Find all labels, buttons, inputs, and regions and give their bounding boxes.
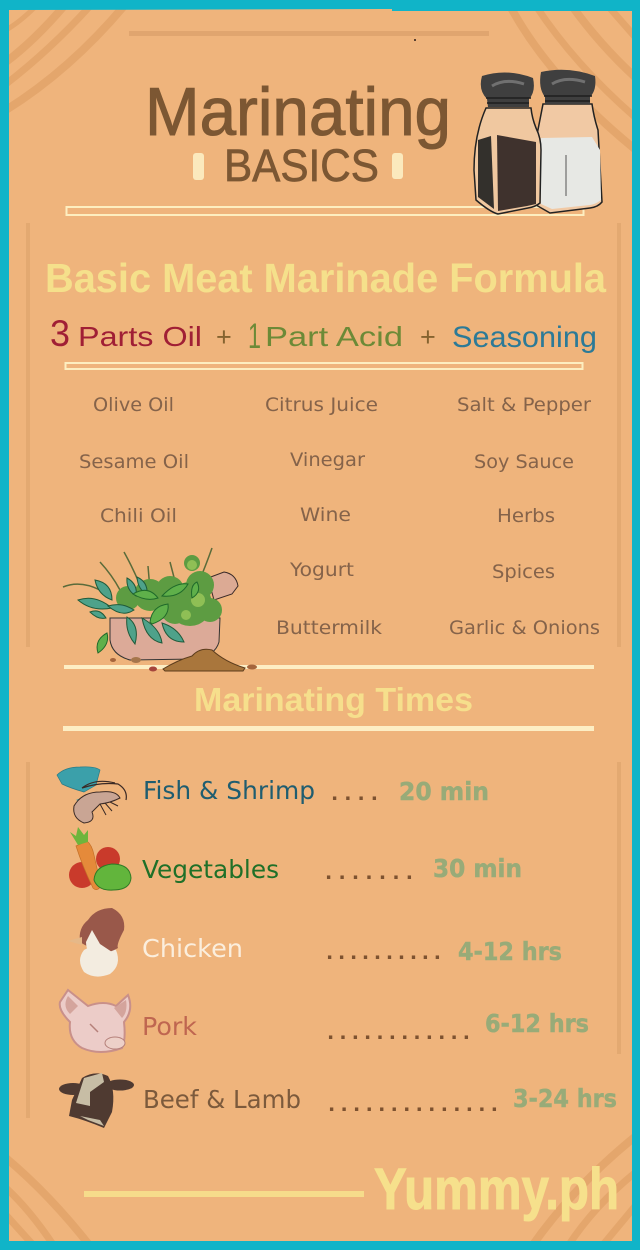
icon: salt and pepper shakers bbox=[474, 70, 602, 214]
side rules bbox=[26, 223, 621, 1118]
ingredients: oils: Olive Oil bbox=[93, 394, 174, 416]
ingredients: acids: Buttermilk bbox=[276, 617, 382, 639]
icon: vegetables bbox=[69, 827, 131, 890]
row: beef and lamb: .............. bbox=[328, 1094, 498, 1116]
title side marks bbox=[193, 153, 403, 180]
row: vegetables: ....... bbox=[325, 862, 413, 884]
section rule bbox=[64, 665, 594, 669]
row: vegetables bbox=[69, 827, 522, 890]
row: beef and lamb bbox=[59, 1073, 617, 1128]
ingredients: oils: Sesame Oil bbox=[79, 451, 189, 473]
title bbox=[145, 74, 451, 191]
formula line: + bbox=[216, 322, 232, 352]
row: vegetables: 30 min bbox=[433, 854, 522, 883]
icon: fish and shrimp bbox=[57, 767, 126, 823]
icon: pig head bbox=[60, 990, 130, 1052]
formula line: Seasoning bbox=[452, 321, 597, 354]
corner decoration: top right bbox=[510, 6, 636, 150]
icon: chicken bbox=[68, 908, 124, 977]
formula line: Parts Oil bbox=[78, 321, 202, 352]
row: fish and shrimp: Fish & Shrimp bbox=[143, 776, 315, 805]
corner decoration: bottom right bbox=[532, 1136, 636, 1246]
row: pork: 6-12 hrs bbox=[485, 1009, 589, 1038]
row: chicken: .......... bbox=[326, 942, 441, 964]
ingredients: seasonings: Soy Sauce bbox=[474, 451, 574, 473]
formula underline box bbox=[66, 363, 582, 369]
icon: herbs in mortar bbox=[63, 548, 257, 672]
corner decoration: top left bbox=[6, 6, 124, 110]
ingredients: acids bbox=[265, 394, 382, 639]
row: chicken bbox=[68, 908, 562, 977]
section rule bbox=[63, 726, 594, 731]
row: pork: Pork bbox=[142, 1012, 198, 1041]
title underline box bbox=[66, 207, 584, 215]
footer rule bbox=[84, 1191, 364, 1197]
row: beef and lamb: Beef & Lamb bbox=[143, 1085, 301, 1114]
ingredients: seasonings: Herbs bbox=[497, 505, 555, 527]
formula line: 3 bbox=[50, 313, 70, 354]
row: chicken: Chicken bbox=[142, 934, 243, 963]
formula line: 1 bbox=[248, 317, 261, 356]
ingredients: seasonings: Spices bbox=[492, 561, 555, 583]
ingredients: oils: Chili Oil bbox=[100, 505, 177, 527]
row: pork bbox=[60, 990, 589, 1052]
title: BASICS bbox=[224, 140, 379, 191]
top decorative bar bbox=[129, 31, 489, 36]
ingredients: acids: Wine bbox=[300, 504, 351, 526]
ingredients: seasonings: Garlic & Onions bbox=[449, 617, 600, 639]
ingredients: oils bbox=[79, 394, 189, 527]
row: beef and lamb: 3-24 hrs bbox=[513, 1084, 617, 1113]
ingredients: seasonings bbox=[449, 394, 600, 639]
row: vegetables: Vegetables bbox=[142, 855, 279, 884]
ingredients: acids: Vinegar bbox=[290, 449, 365, 471]
heading: marinating times: Marinating Times bbox=[194, 681, 473, 718]
formula line: Part Acid bbox=[265, 321, 403, 352]
row: pork: ............ bbox=[327, 1022, 470, 1044]
ingredients: acids: Yogurt bbox=[289, 559, 354, 581]
icon: cow head bbox=[59, 1073, 134, 1128]
ingredients: acids: Citrus Juice bbox=[265, 394, 378, 416]
formula line bbox=[50, 313, 597, 356]
corner decoration: bottom left bbox=[6, 1158, 90, 1246]
title: Marinating bbox=[145, 74, 451, 150]
formula line: + bbox=[420, 322, 436, 352]
heading: formula: Basic Meat Marinade Formula bbox=[45, 255, 607, 301]
ingredients: seasonings: Salt & Pepper bbox=[457, 394, 591, 416]
row: fish and shrimp: .... bbox=[331, 783, 378, 805]
row: fish and shrimp: 20 min bbox=[399, 777, 489, 806]
row: fish and shrimp bbox=[57, 767, 489, 823]
row: chicken: 4-12 hrs bbox=[458, 937, 562, 966]
